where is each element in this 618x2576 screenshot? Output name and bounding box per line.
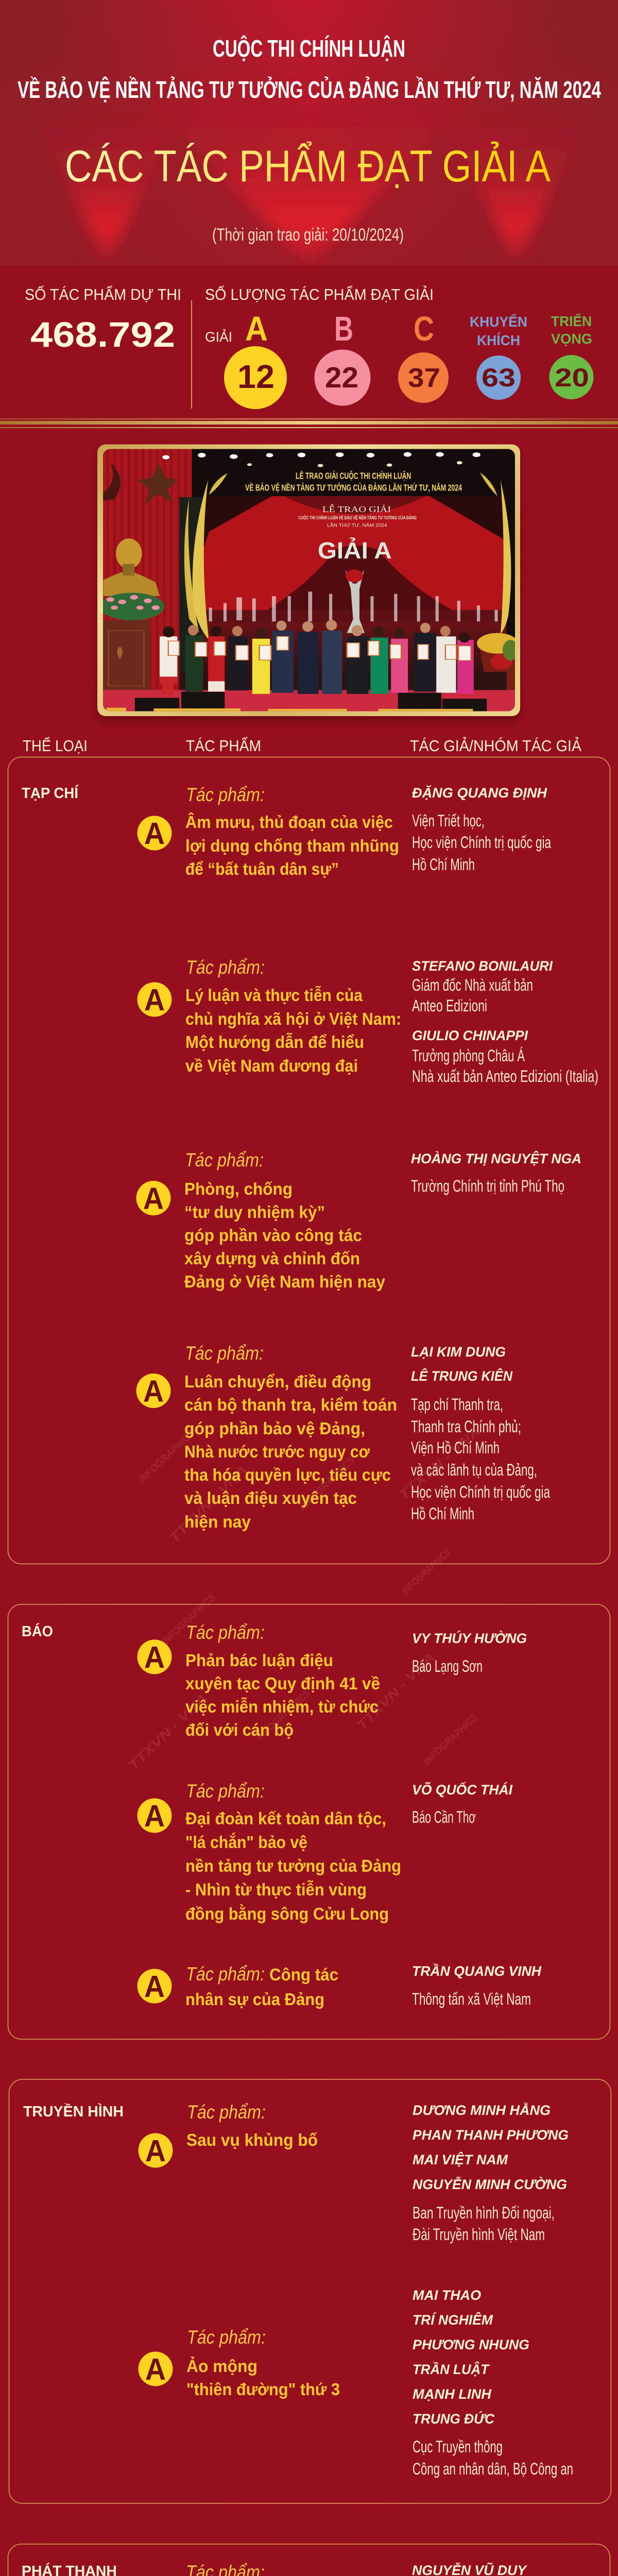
column headers bbox=[23, 737, 581, 755]
entry 2: chủ nghĩa xã hội ở Việt Nam: bbox=[185, 1009, 401, 1028]
entry 1: Tác phẩm: bbox=[187, 2102, 266, 2123]
entry 4: hiện nay bbox=[184, 1512, 251, 1531]
award date: (Thời gian trao giải: 20/10/2024) bbox=[212, 225, 404, 245]
watermarks: INFOGRAPHICS bbox=[421, 1711, 480, 1768]
entry 1: VY THÚY HƯỜNG bbox=[412, 1630, 527, 1646]
panel: phát thanh bbox=[8, 2544, 610, 2576]
entry 2: đồng bằng sông Cửu Long bbox=[185, 1904, 389, 1923]
entry 4: Hồ Chí Minh bbox=[411, 1504, 474, 1523]
entry 1: để “bất tuân dân sự” bbox=[185, 859, 339, 878]
entry 2: Cục Truyền thông bbox=[413, 2437, 503, 2456]
entry 3: Đảng ở Việt Nam hiện nay bbox=[184, 1272, 386, 1291]
stat: awards by tier: KHÍCH bbox=[477, 332, 520, 348]
watermarks: INFOGRAPHICS bbox=[297, 1454, 357, 1513]
entry 2: TRÍ NGHIÊM bbox=[413, 2312, 493, 2328]
entry 2: A bbox=[145, 2352, 166, 2386]
entry 1: việc miễn nhiệm, từ chức bbox=[185, 1697, 379, 1716]
entry 2: về Việt Nam đương đại bbox=[185, 1056, 358, 1075]
entry 1: Hồ Chí Minh bbox=[412, 855, 475, 874]
entry 1: ĐẶNG QUANG ĐỊNH bbox=[412, 785, 547, 801]
stat: awards by tier: GIẢI bbox=[205, 328, 232, 345]
entry 2: A bbox=[144, 983, 165, 1017]
entry 2: Ảo mộng bbox=[186, 2357, 258, 2376]
stat: awards by tier: TRIỂN bbox=[551, 313, 592, 329]
entry 2: Tác phẩm: bbox=[187, 2327, 266, 2348]
entry 1: A bbox=[144, 1640, 165, 1674]
entry 4: A bbox=[143, 1375, 164, 1409]
entry 1: Tác phẩm: bbox=[186, 1622, 265, 1643]
entry 3: Công tác bbox=[269, 1965, 338, 1984]
entry 4: Học viện Chính trị quốc gia bbox=[411, 1483, 550, 1501]
ceremony photo in gold frame bbox=[97, 444, 520, 716]
entry 2: "thiên đường" thứ 3 bbox=[186, 2380, 340, 2399]
stat: awards by tier: 20 bbox=[555, 363, 589, 392]
entry 2: Một hướng dẫn để hiểu bbox=[185, 1032, 364, 1052]
entry 4: Tác phẩm: bbox=[185, 1343, 264, 1364]
entry 4: cán bộ thanh tra, kiểm toán bbox=[184, 1395, 397, 1414]
category label: TẠP CHÍ bbox=[22, 784, 79, 802]
entry 3: góp phần vào công tác bbox=[184, 1226, 362, 1245]
entry 4: tha hóa quyền lực, tiêu cực bbox=[184, 1465, 391, 1484]
entry 4: và luận điệu xuyên tạc bbox=[184, 1488, 357, 1507]
bust bbox=[116, 538, 142, 569]
left curtain bbox=[100, 449, 192, 693]
entry 2: nền tảng tư tưởng của Đảng bbox=[185, 1856, 401, 1875]
entry 4 bbox=[136, 1343, 550, 1531]
award recipients bbox=[160, 620, 474, 694]
right podium and flowers bbox=[480, 649, 515, 690]
watermarks: INFOGRAPHICS bbox=[254, 1687, 313, 1743]
stat: awards by tier: 12 bbox=[237, 358, 274, 395]
entry 4: LẠI KIM DUNG bbox=[411, 1344, 506, 1360]
panel: truyền hình bbox=[9, 2079, 611, 2503]
stat: awards by tier: B bbox=[334, 310, 353, 348]
stat: awards by tier: KHUYẾN bbox=[470, 314, 527, 330]
column headers: TÁC GIẢ/NHÓM TÁC GIẢ bbox=[410, 737, 581, 755]
panel: báo bbox=[8, 1604, 610, 2039]
entry 1: A bbox=[145, 2134, 166, 2168]
entry 1: A bbox=[144, 817, 165, 851]
entry 1: đối với cán bộ bbox=[185, 1720, 294, 1739]
entry 3: A bbox=[144, 1970, 165, 2004]
entry 2: A bbox=[144, 1799, 165, 1833]
entry 3: HOÀNG THỊ NGUYỆT NGA bbox=[411, 1150, 581, 1166]
header title bbox=[18, 35, 601, 103]
entry 2 bbox=[137, 1781, 512, 1923]
entry 2: TRẦN LUẬT bbox=[413, 2361, 490, 2377]
entry 3: TRẦN QUANG VINH bbox=[412, 1963, 541, 1979]
entry 4: và các lãnh tụ của Đảng, bbox=[411, 1461, 537, 1479]
watermarks: INFOGRAPHICS bbox=[159, 1591, 218, 1648]
entry 3 bbox=[136, 1149, 581, 1291]
watermarks: TTXVN - VNA bbox=[396, 1423, 484, 1503]
ceremony photo in gold frame: CUỘC THI CHÍNH LUẬN VỀ BẢO VỆ NỀN TẢNG TƯ TƯỞNG CỦA ĐẢNG bbox=[298, 515, 417, 520]
entry 2: PHƯƠNG NHUNG bbox=[413, 2337, 529, 2352]
entry 2: Tác phẩm: bbox=[186, 1781, 265, 1802]
entry 1 bbox=[137, 2562, 573, 2576]
speakers bbox=[135, 692, 487, 711]
entry 4: góp phần bảo vệ Đảng, bbox=[184, 1419, 365, 1438]
entry 1: xuyên tạc Quy định 41 về bbox=[185, 1674, 380, 1693]
watermarks: INFOGRAPHICS bbox=[400, 1546, 453, 1597]
entry 2: Lý luận và thực tiễn của bbox=[185, 986, 363, 1005]
entry 3: Tác phẩm: bbox=[185, 1149, 264, 1171]
entry 2: Đại đoàn kết toàn dân tộc, bbox=[185, 1809, 386, 1828]
hammer and sickle, star bbox=[104, 463, 121, 501]
stat: awards by tier: 22 bbox=[325, 361, 358, 394]
entry 1: MAI VIỆT NAM bbox=[413, 2151, 508, 2167]
stat: total entries: 468.792 bbox=[30, 315, 175, 354]
entry 1: NGUYỄN MINH CƯỜNG bbox=[413, 2176, 567, 2192]
entry 1: Sau vụ khủng bố bbox=[186, 2130, 318, 2149]
entry 1: Học viện Chính trị quốc gia bbox=[412, 833, 551, 852]
entry 2: GIULIO CHINAPPI bbox=[412, 1028, 528, 1043]
entry 3: xây dựng và chỉnh đốn bbox=[184, 1249, 360, 1268]
panel: tạp chí bbox=[8, 757, 610, 1564]
entry 3: Phòng, chống bbox=[184, 1179, 293, 1198]
entry 1: Ban Truyền hình Đối ngoại, bbox=[413, 2204, 555, 2222]
entry 3: Tác phẩm: bbox=[186, 1963, 265, 1985]
stat: total entries bbox=[25, 285, 181, 354]
stat: total entries: SỐ TÁC PHẨM DỰ THI bbox=[25, 285, 181, 303]
entry 1 bbox=[138, 2102, 569, 2244]
LED screen text: LỄ TRAO GIẢI bbox=[322, 504, 391, 514]
entry 4: Tạp chí Thanh tra, bbox=[411, 1395, 503, 1414]
entry 2: Tác phẩm: bbox=[186, 957, 265, 978]
header background with spotlights bbox=[0, 0, 618, 265]
stat: awards by tier bbox=[205, 285, 593, 409]
entry 1: lợi dụng chống tham nhũng bbox=[185, 836, 399, 855]
column headers: TÁC PHẨM bbox=[186, 737, 261, 755]
category label: TRUYỀN HÌNH bbox=[23, 2103, 124, 2120]
entry 4: Nhà nước trước nguy cơ bbox=[184, 1442, 370, 1461]
entry 2: Báo Cần Thơ bbox=[412, 1808, 476, 1826]
entry 1: DƯƠNG MINH HẰNG bbox=[413, 2102, 551, 2118]
entry 2: STEFANO BONILAURI bbox=[412, 958, 553, 974]
ceremony photo in gold frame: LỄ TRAO GIẢI CUỘC THI CHÍNH LUẬN bbox=[296, 470, 411, 481]
entry 2: Trưởng phòng Châu Á bbox=[412, 1046, 525, 1065]
entry 2: MAI THAO bbox=[413, 2287, 481, 2303]
entry 3: A bbox=[143, 1182, 164, 1216]
entry 1: PHAN THANH PHƯƠNG bbox=[413, 2127, 569, 2143]
stage lights bbox=[162, 455, 169, 460]
entry 2: VÕ QUỐC THÁI bbox=[412, 1782, 512, 1798]
watermarks: TTXVN - VNA bbox=[166, 1462, 250, 1546]
entry 4: Luân chuyển, điều động bbox=[184, 1372, 371, 1391]
entry 2: - Nhìn từ thực tiễn vùng bbox=[185, 1880, 367, 1899]
entry 3 bbox=[137, 1963, 541, 2009]
watermarks: TTXVN - VNA bbox=[354, 1650, 438, 1733]
header title: CUỘC THI CHÍNH LUẬN bbox=[213, 35, 405, 62]
entry 2: "lá chắn" bảo vệ bbox=[185, 1833, 307, 1852]
stat: awards by tier: C bbox=[414, 310, 434, 348]
entry 3: Thông tấn xã Việt Nam bbox=[412, 1990, 531, 2008]
stat: awards by tier: SỐ LƯỢNG TÁC PHẨM ĐẠT GIẢI bbox=[205, 285, 434, 303]
entry 4: Thanh tra Chính phủ; bbox=[411, 1417, 521, 1436]
column headers: THỂ LOẠI bbox=[23, 737, 88, 755]
entry 1 bbox=[137, 784, 551, 878]
LED screen bbox=[179, 497, 203, 676]
entry 1: Báo Lạng Sơn bbox=[412, 1657, 483, 1675]
stat: awards by tier: A bbox=[245, 310, 268, 348]
watermarks: TTXVN - VNA bbox=[125, 1690, 210, 1773]
ceremony photo in gold frame: GIẢI A bbox=[318, 537, 392, 564]
entry 2: MẠNH LINH bbox=[413, 2386, 492, 2402]
entry 2 bbox=[138, 2287, 573, 2478]
entry 1: Phản bác luận điệu bbox=[185, 1651, 333, 1670]
entry 4: LÊ TRUNG KIÊN bbox=[411, 1368, 512, 1384]
watermarks: INFOGRAPHICS bbox=[136, 1428, 197, 1485]
entry 4: Viện Hồ Chí Minh bbox=[411, 1438, 500, 1457]
entry 1: Đài Truyền hình Việt Nam bbox=[413, 2225, 545, 2244]
golden leaves bbox=[184, 498, 199, 633]
entry 1: Viện Triết học, bbox=[412, 811, 485, 830]
entry 1: Tác phẩm: bbox=[186, 784, 265, 805]
entry 3: nhân sự của Đảng bbox=[185, 1990, 324, 2009]
stage floor bbox=[100, 690, 518, 712]
lectern bbox=[103, 620, 150, 690]
category label: BÁO bbox=[22, 1622, 53, 1640]
entry 2: TRUNG ĐỨC bbox=[413, 2411, 494, 2427]
stat: awards by tier: 63 bbox=[482, 363, 516, 392]
entry 2: Giám đốc Nhà xuất bản bbox=[412, 976, 533, 994]
trophy bbox=[345, 570, 365, 633]
flowers left bbox=[100, 592, 164, 620]
entry 2: Anteo Edizioni bbox=[412, 996, 487, 1015]
ceremony photo in gold frame: LẦN THỨ TƯ, NĂM 2024 bbox=[327, 522, 387, 528]
entry 1 bbox=[137, 1622, 527, 1739]
watermarks bbox=[125, 1423, 484, 1773]
entry 3: “tư duy nhiệm kỳ” bbox=[184, 1202, 325, 1222]
stat: awards by tier: VỌNG bbox=[551, 331, 592, 347]
stat: awards by tier: 37 bbox=[408, 363, 440, 393]
entry 1: Âm mưu, thủ đoạn của việc bbox=[185, 812, 393, 832]
entry 2 bbox=[137, 957, 598, 1086]
